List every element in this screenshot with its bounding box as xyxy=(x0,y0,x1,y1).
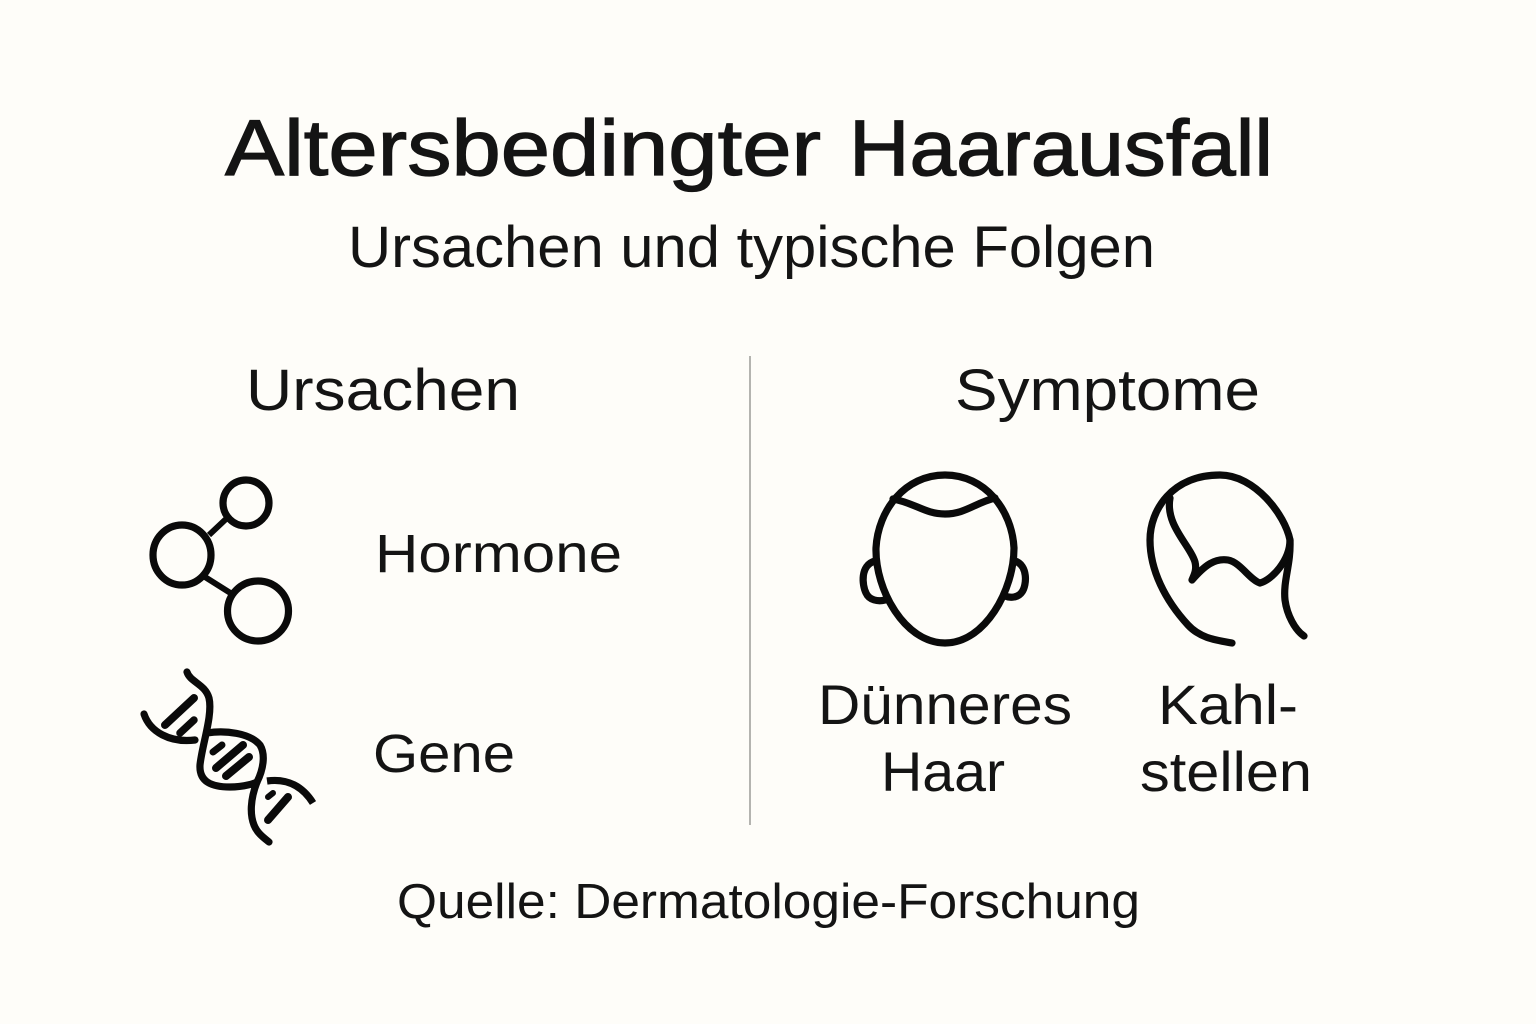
icon: DNA helix xyxy=(144,672,313,842)
label: Gene: Gene xyxy=(373,724,515,784)
heading: Symptome: Symptome xyxy=(955,358,1260,423)
icon: bald spots head xyxy=(1150,475,1304,643)
label: Kahlstellen: stellen xyxy=(1140,740,1312,803)
title: Altersbedingter xyxy=(225,103,821,192)
title xyxy=(225,103,1273,192)
icon: hormone molecule xyxy=(153,480,288,641)
title: Haarausfall xyxy=(849,103,1273,192)
label: Dünneres Haar: Dünneres xyxy=(818,673,1072,736)
subtitle: Ursachen und typische Folgen xyxy=(348,215,1155,280)
divider xyxy=(749,356,751,825)
label: Hormone: Hormone xyxy=(375,524,622,584)
label: Dünneres Haar xyxy=(818,673,1072,803)
label: Kahlstellen: Kahl- xyxy=(1158,673,1298,736)
heading: Ursachen: Ursachen xyxy=(246,358,520,423)
label: Dünneres Haar: Haar xyxy=(881,740,1005,803)
label: Kahlstellen xyxy=(1140,673,1312,803)
source note: Quelle: Dermatologie-Forschung xyxy=(397,875,1140,929)
icon: thinning hair head xyxy=(863,475,1025,643)
